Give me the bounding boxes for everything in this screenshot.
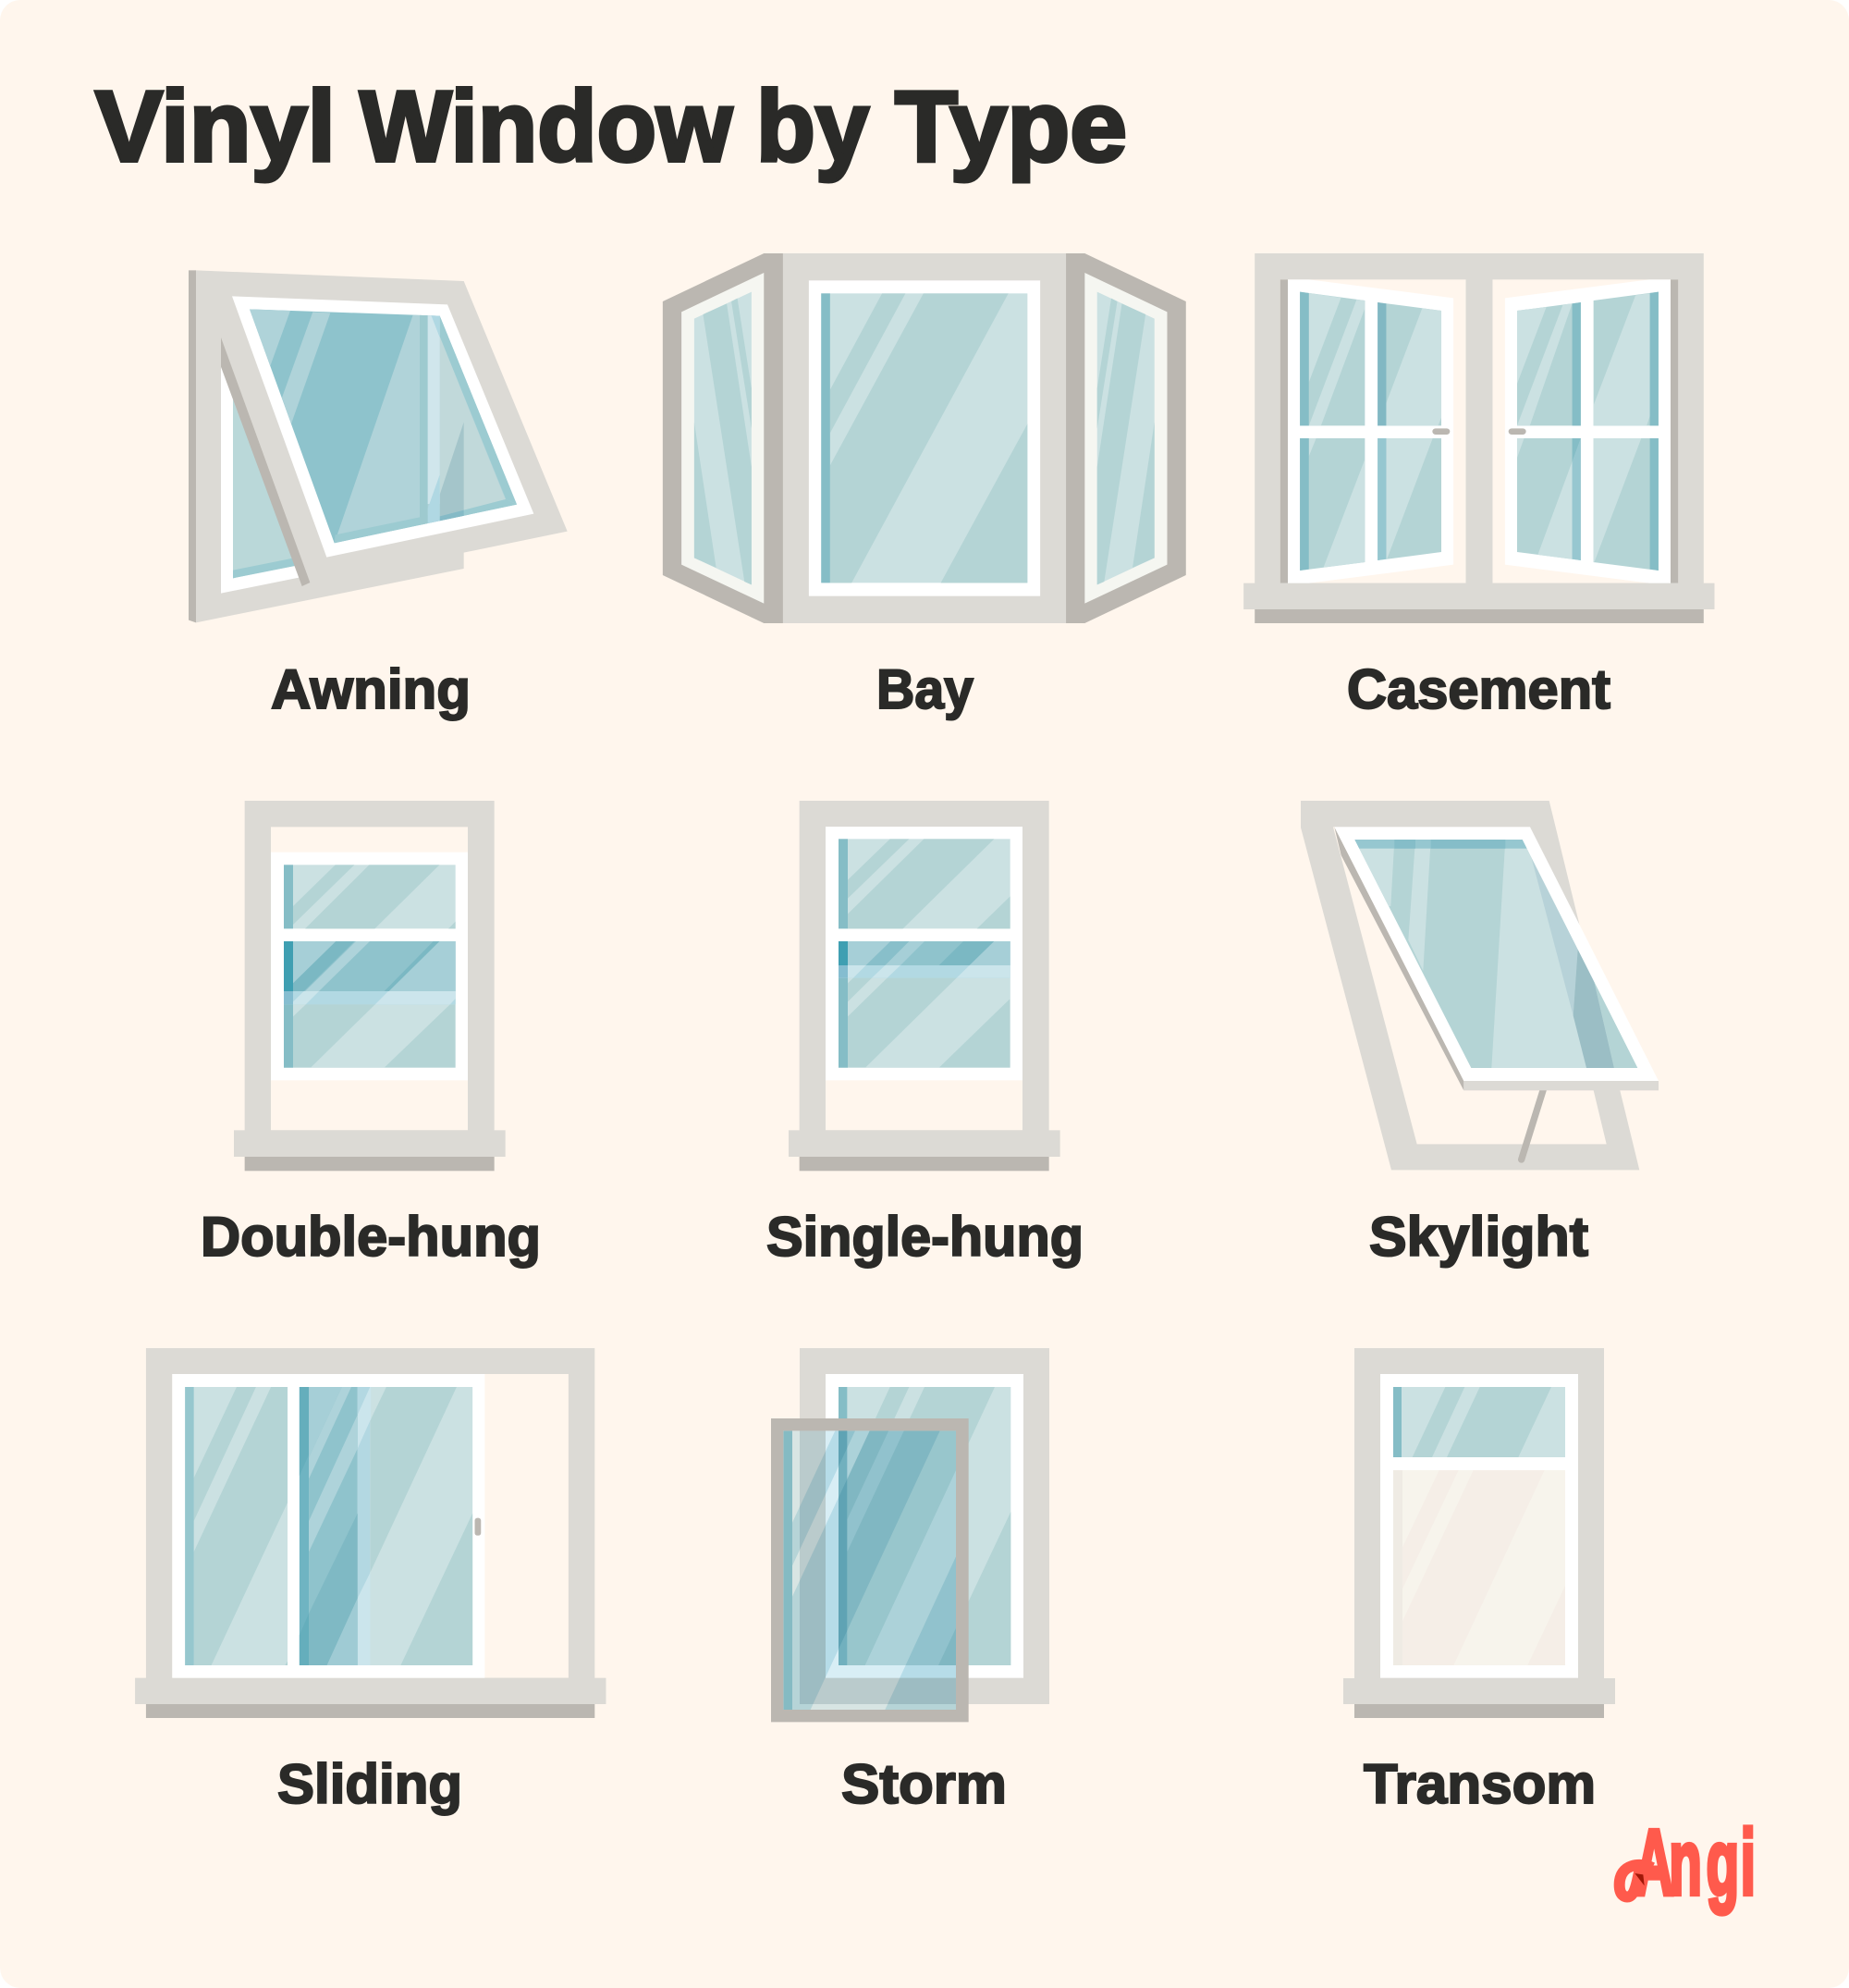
window: sliding [135,1348,606,1718]
window: bay [663,253,1186,623]
title: Vinyl [95,70,336,183]
lower pane [1393,1470,1565,1665]
label: Casement: Casement [1347,658,1610,720]
left sash [1288,279,1453,583]
window: casement [1243,253,1715,623]
right sash [1505,279,1671,583]
window: awning [189,270,568,622]
title: Type [895,70,1127,183]
title: by [756,70,869,183]
logo: Angi: g [1707,1811,1739,1914]
label: Bay: Bay [876,658,974,720]
label: Skylight: Skylight [1369,1206,1588,1268]
label: Transom: Transom [1364,1753,1596,1815]
left pane [185,1387,288,1665]
left side panel [663,253,783,623]
window: skylight [1301,801,1659,1170]
lower pane [284,941,456,1068]
transom pane [1393,1387,1565,1457]
window: transom [1343,1348,1615,1718]
storm panel frame [771,1418,969,1722]
window: single-hung [789,801,1060,1171]
logo: Angi: i [1741,1811,1756,1914]
label: Single-hung: Single-hung [766,1206,1084,1268]
storm panel glass [783,1430,956,1710]
upper pane [284,865,456,928]
title [95,70,1127,183]
right side panel [1066,253,1186,623]
logo: Angi [1620,1811,1756,1914]
upper pane [839,839,1010,928]
logo: Angi: A [1635,1811,1673,1914]
label: Double-hung: Double-hung [201,1206,541,1268]
label: Storm: Storm [841,1753,1007,1815]
center panel [783,253,1066,623]
right pane [300,1387,472,1665]
label: Sliding: Sliding [277,1753,462,1815]
title: Window [360,70,732,183]
window: storm [771,1348,1049,1722]
lower pane [839,941,1010,1068]
window: double-hung [234,801,506,1171]
label: Awning: Awning [271,658,471,720]
handle [475,1518,481,1536]
logo: Angi: n [1669,1811,1702,1914]
